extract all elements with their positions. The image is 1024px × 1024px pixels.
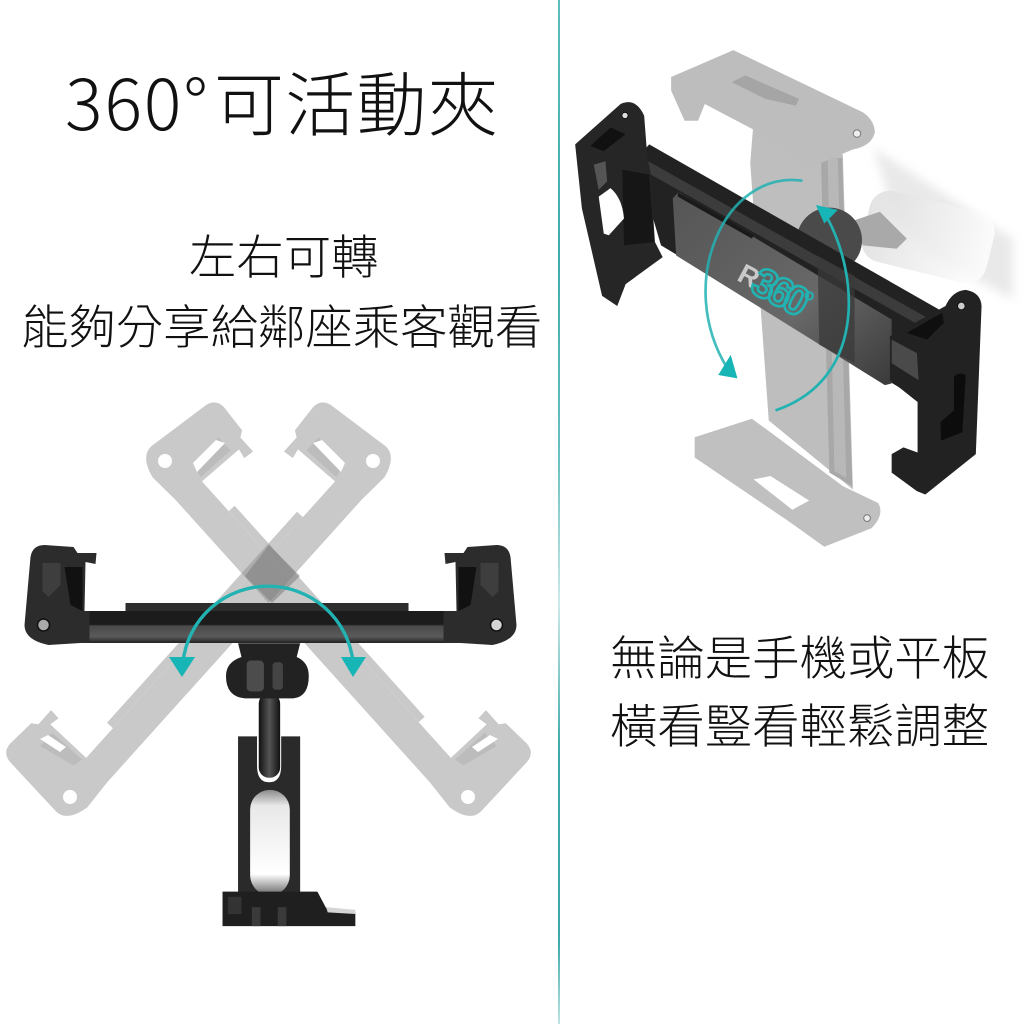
ball joint behind bar (797, 208, 862, 273)
stem (259, 693, 280, 778)
teal 360 label: 360 (744, 258, 816, 326)
center plate (126, 603, 408, 612)
gray clamp: NE to SW position (0, 393, 400, 825)
right finger (458, 567, 476, 611)
clamp body (24, 545, 516, 645)
black stand: ball joint, stem, bracket and base (223, 643, 355, 926)
teal rotation arrow: left and right (169, 586, 366, 677)
left screw (38, 619, 50, 631)
black left grip (575, 102, 663, 306)
logo plate (673, 192, 892, 385)
bracket slot (250, 790, 290, 895)
text: phone or tablet: 無論是手機或平板 (610, 633, 989, 686)
gray clamp pivot holes (40, 440, 498, 804)
column seen through bar (818, 255, 855, 363)
black clamp: horizontal position (24, 545, 516, 645)
base (223, 892, 355, 926)
black bar (636, 144, 939, 402)
printed brand: R (733, 258, 765, 294)
divider line (558, 0, 560, 1024)
text: landscape and portrait: 橫看豎看輕鬆調整 (610, 701, 989, 754)
subtitle: rotate left and right: 左右可轉 (189, 232, 379, 285)
title: 360°可活動夾 (65, 50, 499, 151)
teal 360 arrow ring (706, 180, 849, 410)
bracket (238, 736, 300, 893)
subtitle: share with neighbour passenger: 能夠分享給鄰座乘客觀看 (21, 302, 542, 355)
ball joint (226, 643, 309, 698)
gray top head (671, 50, 875, 170)
left finger (64, 567, 82, 611)
gray bottom head (695, 419, 880, 547)
crossing overlap shade (245, 545, 300, 603)
black right grip (890, 290, 982, 495)
right product: rotating clamp (575, 50, 1013, 547)
bar (90, 611, 444, 643)
faded headrest arm (850, 148, 1013, 299)
gray vertical column (750, 121, 853, 489)
right screw (490, 619, 502, 631)
gray clamp: NW to SE position (137, 393, 540, 825)
